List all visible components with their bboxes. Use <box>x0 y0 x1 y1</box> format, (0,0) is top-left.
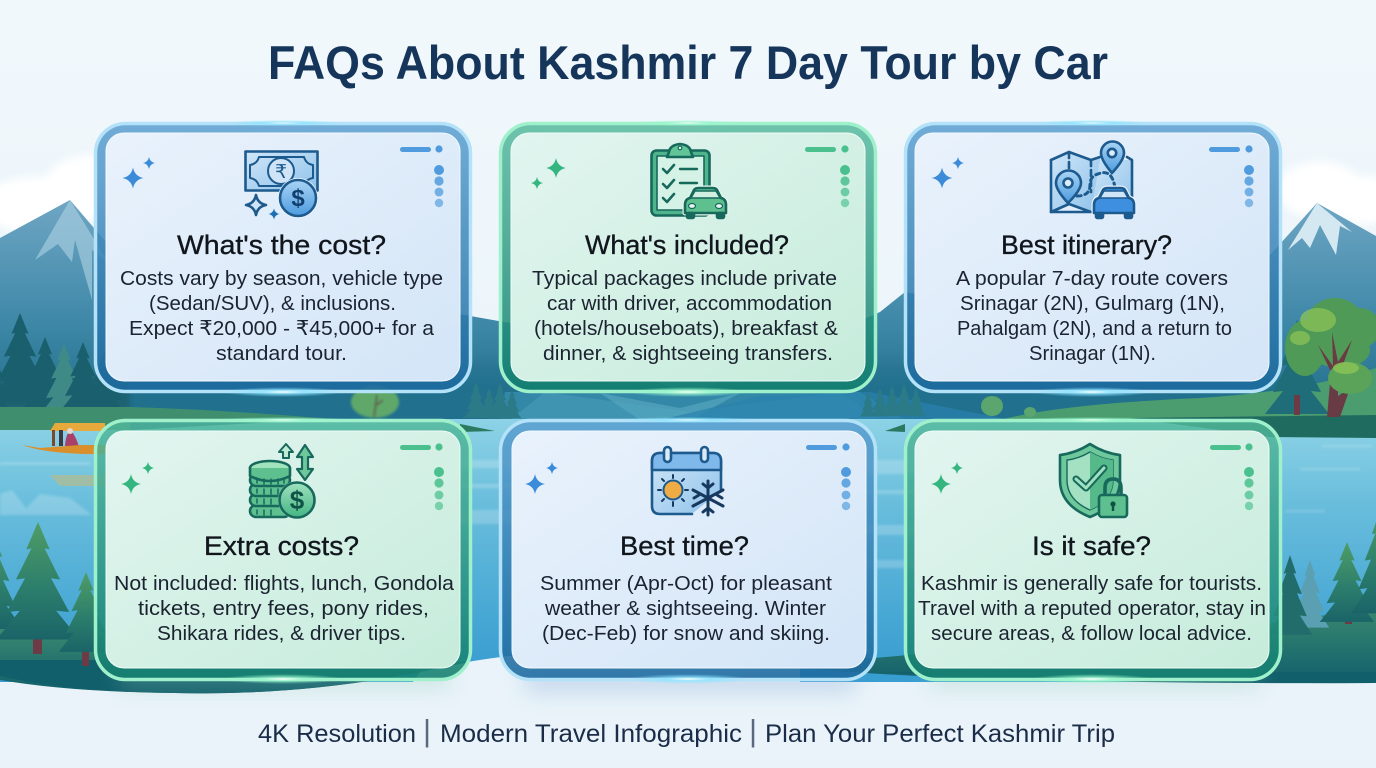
body text: secure areas, & follow local advice. <box>931 622 1252 645</box>
body text: standard tour. <box>216 342 347 365</box>
body text: Srinagar (1N). <box>1029 342 1156 365</box>
right tree group <box>1265 298 1376 417</box>
icon: map, pins and car <box>1051 142 1134 218</box>
panel: Best itinerary? <box>906 120 1280 397</box>
body text: (Dec-Feb) for snow and skiing. <box>542 622 830 645</box>
footer tagline: Plan Your Perfect Kashmir Trip <box>765 720 1115 748</box>
body text: weather & sightseeing. Winter <box>544 597 826 620</box>
body text <box>532 267 838 365</box>
body text: Travel with a reputed operator, stay in <box>918 597 1266 620</box>
lower white bank <box>400 650 800 700</box>
sparkles <box>525 462 558 494</box>
small tree mid left <box>351 386 399 418</box>
body text: Not included: flights, lunch, Gondola <box>114 572 455 595</box>
tree line: gaps <box>464 382 926 419</box>
lake <box>0 419 1376 700</box>
sparkles <box>531 158 566 189</box>
window controls <box>806 443 851 510</box>
window controls <box>400 145 444 207</box>
heading: What's included? <box>585 230 789 260</box>
body text: Pahalgam (2N), and a return to <box>957 317 1232 340</box>
icon: calendar with sun and snowflake <box>652 447 723 515</box>
tree line: far left <box>0 313 127 420</box>
body text: Costs vary by season, vehicle type <box>120 267 443 290</box>
window controls <box>1210 443 1254 510</box>
window controls <box>805 145 850 207</box>
distant mountains <box>0 200 1376 430</box>
body text: Summer (Apr-Oct) for pleasant <box>540 572 832 595</box>
body text: (hotels/houseboats), breakfast & <box>534 317 838 340</box>
footer tagline: | <box>423 713 431 748</box>
foreground pines right <box>1268 510 1376 635</box>
footer tagline: | <box>749 713 757 748</box>
body text: (Sedan/SUV), & inclusions. <box>149 292 396 315</box>
icon: checklist and car <box>652 144 726 218</box>
left shore <box>0 407 330 419</box>
body text <box>918 572 1266 645</box>
body text: Kashmir is generally safe for tourists. <box>921 572 1262 595</box>
panel: Extra costs? <box>96 417 470 684</box>
icon: shield and padlock <box>1060 444 1127 517</box>
body text <box>114 572 455 645</box>
body text: Shikara rides, & driver tips. <box>157 622 406 645</box>
body text <box>120 267 443 365</box>
footer tagline: Modern Travel Infographic <box>440 720 742 748</box>
body text: Typical packages include private <box>532 267 837 290</box>
panel: What's included? <box>500 120 876 397</box>
sparkles <box>932 157 964 188</box>
sparkles <box>931 462 963 494</box>
dark base under left trees <box>0 375 130 409</box>
foreground pines left <box>0 522 113 666</box>
footer tagline: 4K Resolution <box>258 720 416 748</box>
icon: coins and arrows <box>250 444 316 519</box>
icon: banknote with coin: ₹ <box>275 162 287 183</box>
sparkles <box>122 157 155 188</box>
heading: Extra costs? <box>204 531 359 561</box>
heading: Is it safe? <box>1032 531 1151 561</box>
panel: Best time? <box>500 417 876 684</box>
icon: coins and arrows: $ <box>290 485 305 515</box>
icon: banknote with coin: $ <box>291 185 305 212</box>
body text: A popular 7-day route covers <box>956 267 1228 290</box>
heading: Best itinerary? <box>1001 230 1172 260</box>
title: FAQs About Kashmir 7 Day Tour by Car <box>268 36 1108 89</box>
body text: dinner, & sightseeing transfers. <box>543 342 833 365</box>
footer tagline <box>258 713 1115 748</box>
heading: What's the cost? <box>177 230 386 260</box>
panel: Is it safe? <box>906 417 1280 684</box>
window controls <box>400 443 444 510</box>
right shore hill <box>1000 368 1376 440</box>
body text: car with driver, accommodation <box>547 292 832 315</box>
body text <box>956 267 1232 365</box>
body text <box>540 572 832 645</box>
heading: Best time? <box>620 531 749 561</box>
body text: Srinagar (2N), Gulmarg (1N), <box>960 292 1225 315</box>
panel: What's the cost? <box>96 120 470 397</box>
body text: tickets, entry fees, pony rides, <box>138 597 429 620</box>
band between rows: valley <box>120 350 1280 420</box>
window controls <box>1209 145 1254 207</box>
icon: banknote with coin <box>246 152 318 220</box>
shikara boat <box>22 423 105 486</box>
body text: Expect ₹20,000 - ₹45,000+ for a <box>129 317 435 340</box>
sparkles <box>121 462 154 494</box>
shadows below lower cards <box>120 668 1260 692</box>
foreground ground <box>0 628 470 693</box>
